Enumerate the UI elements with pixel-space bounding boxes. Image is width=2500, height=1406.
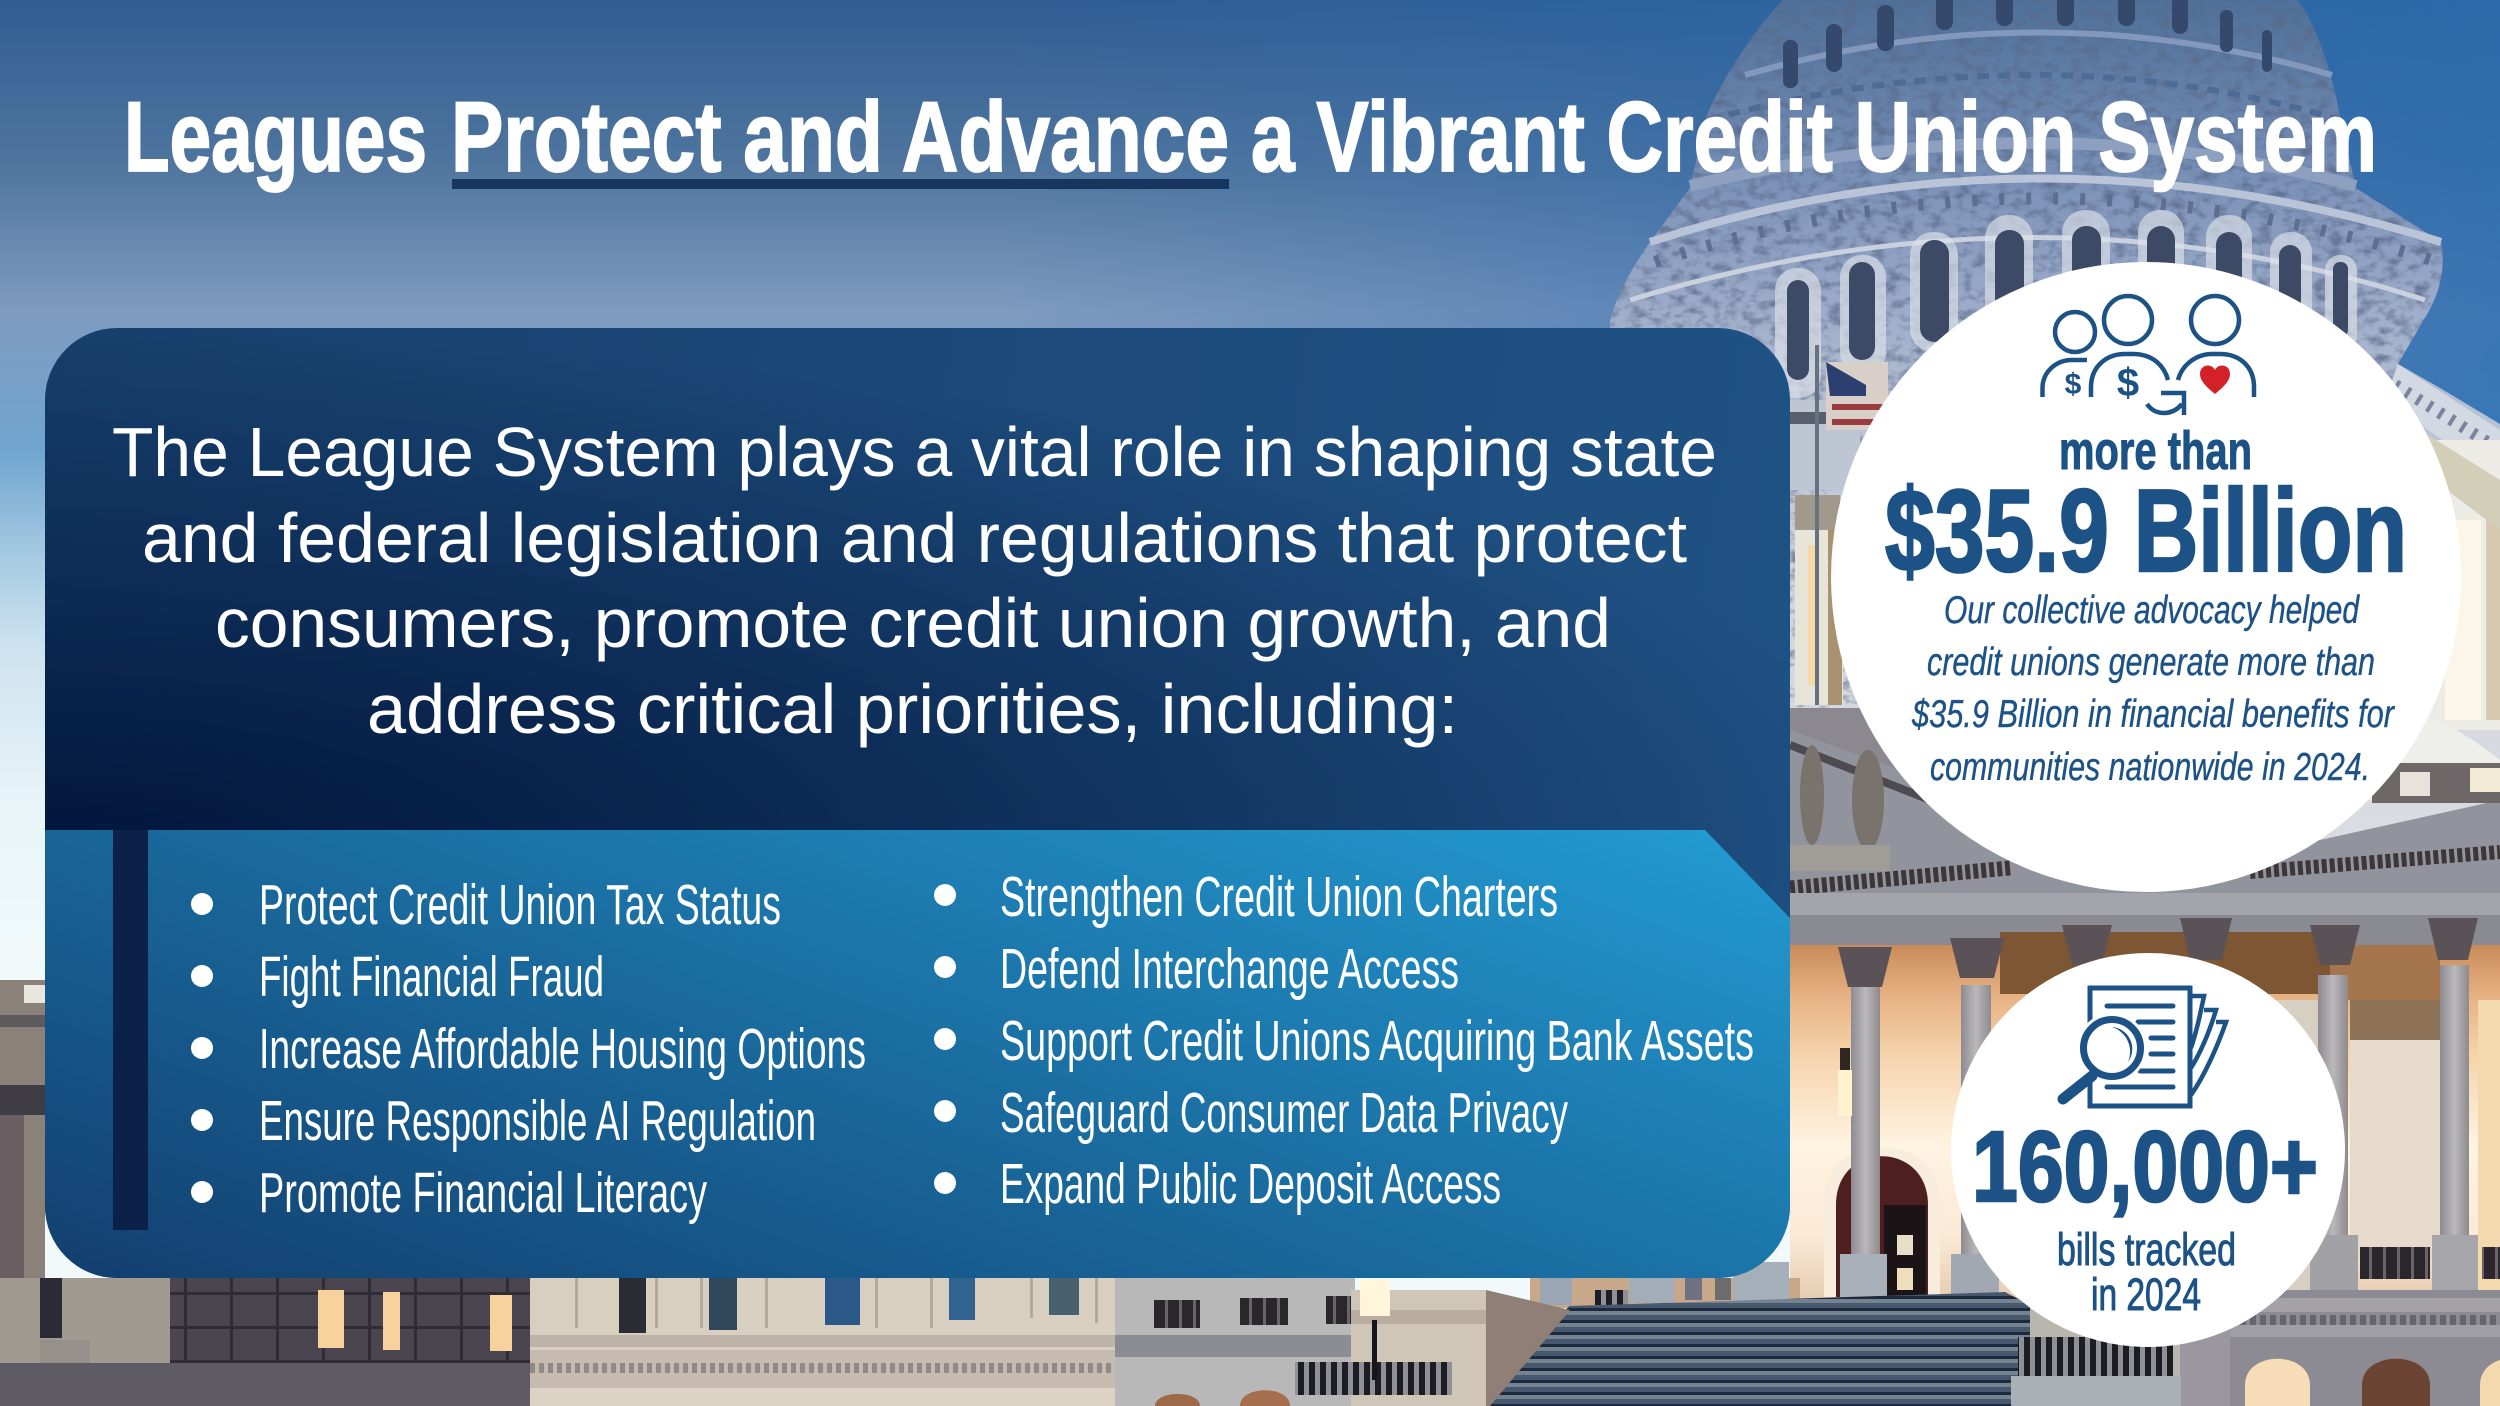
priorities list: right column: Defend Interchange Access <box>1000 937 1459 1001</box>
priorities list: right column: Safeguard Consumer Data Privacy <box>1000 1081 1568 1145</box>
stone base right <box>2030 1290 2500 1406</box>
priorities list: left column: Fight Financial Fraud <box>259 945 604 1009</box>
priorities list: right column <box>934 865 1754 1216</box>
icon: people exchanging money and care: $ <box>2065 368 2082 401</box>
icon: documents and magnifying glass <box>2063 988 2226 1106</box>
intro text <box>112 413 1717 748</box>
column capitals <box>1838 918 2478 987</box>
icon: people exchanging money and care <box>2042 296 2254 415</box>
lantern <box>1838 1048 1852 1116</box>
columns <box>1840 965 2478 1300</box>
stat description: communities nationwide in 2024. <box>1930 746 2370 789</box>
intro text: and federal legislation and regulations that protect <box>142 499 1687 577</box>
icon: people exchanging money and care: $ <box>2117 361 2139 405</box>
priorities list: left column: Increase Affordable Housing Options <box>259 1017 866 1081</box>
priorities list: right column: Strengthen Credit Union Charters <box>1000 865 1558 929</box>
priorities list: left column: Ensure Responsible AI Regulation <box>259 1089 816 1153</box>
priorities list: left column <box>191 873 866 1225</box>
flag and pole <box>1815 345 1888 705</box>
dome base: balustrade and colonnade <box>2385 364 2500 480</box>
stat label <box>2057 1224 2236 1320</box>
stat label: more than <box>2059 421 2252 481</box>
background: steps and lower facade <box>0 980 2181 1406</box>
accent bar <box>113 830 148 1230</box>
stat description: Our collective advocacy helped <box>1944 589 2360 632</box>
priorities list: left column: Promote Financial Literacy <box>259 1161 707 1225</box>
priorities list: right column: Support Credit Unions Acquiring Bank Assets <box>1000 1009 1754 1073</box>
intro text: The League System plays a vital role in shaping state <box>112 413 1717 491</box>
stat value: 160,000+ <box>1972 1111 2318 1223</box>
lit windows <box>318 1290 512 1351</box>
stat circle: $35.9 Billion <box>1831 262 2461 892</box>
priorities list: right column: Expand Public Deposit Access <box>1000 1152 1501 1216</box>
title: Protect and Advance <box>451 81 1229 192</box>
background: capitol portico <box>1790 708 2500 1406</box>
stat description: credit unions generate more than <box>1927 641 2375 684</box>
title: Leagues <box>124 81 427 192</box>
title <box>124 81 2377 192</box>
left edge building <box>0 980 45 1280</box>
panel: upper intro background <box>45 328 1790 1278</box>
panel: lower priorities band <box>45 830 1790 1278</box>
cream facade <box>530 1278 1120 1406</box>
stat label: in 2024 <box>2091 1269 2201 1320</box>
title underline <box>452 179 1229 189</box>
panel: main blue card <box>45 328 1790 1278</box>
stat label: bills tracked <box>2057 1224 2236 1275</box>
stat description <box>1911 589 2396 789</box>
pediment sculpture <box>1790 745 1890 871</box>
stat circle: 160,000+ bills <box>1951 953 2345 1347</box>
pale wing with railings <box>1115 1278 1355 1406</box>
door <box>1824 1148 1940 1297</box>
priorities list: left column: Protect Credit Union Tax Status <box>259 873 781 937</box>
intro text: consumers, promote credit union growth, and <box>215 584 1611 662</box>
intro text: address critical priorities, including: <box>367 670 1458 748</box>
upper dome windows <box>1783 0 2272 88</box>
drum windows <box>1775 210 2357 398</box>
background: capitol dome <box>1600 0 2500 900</box>
